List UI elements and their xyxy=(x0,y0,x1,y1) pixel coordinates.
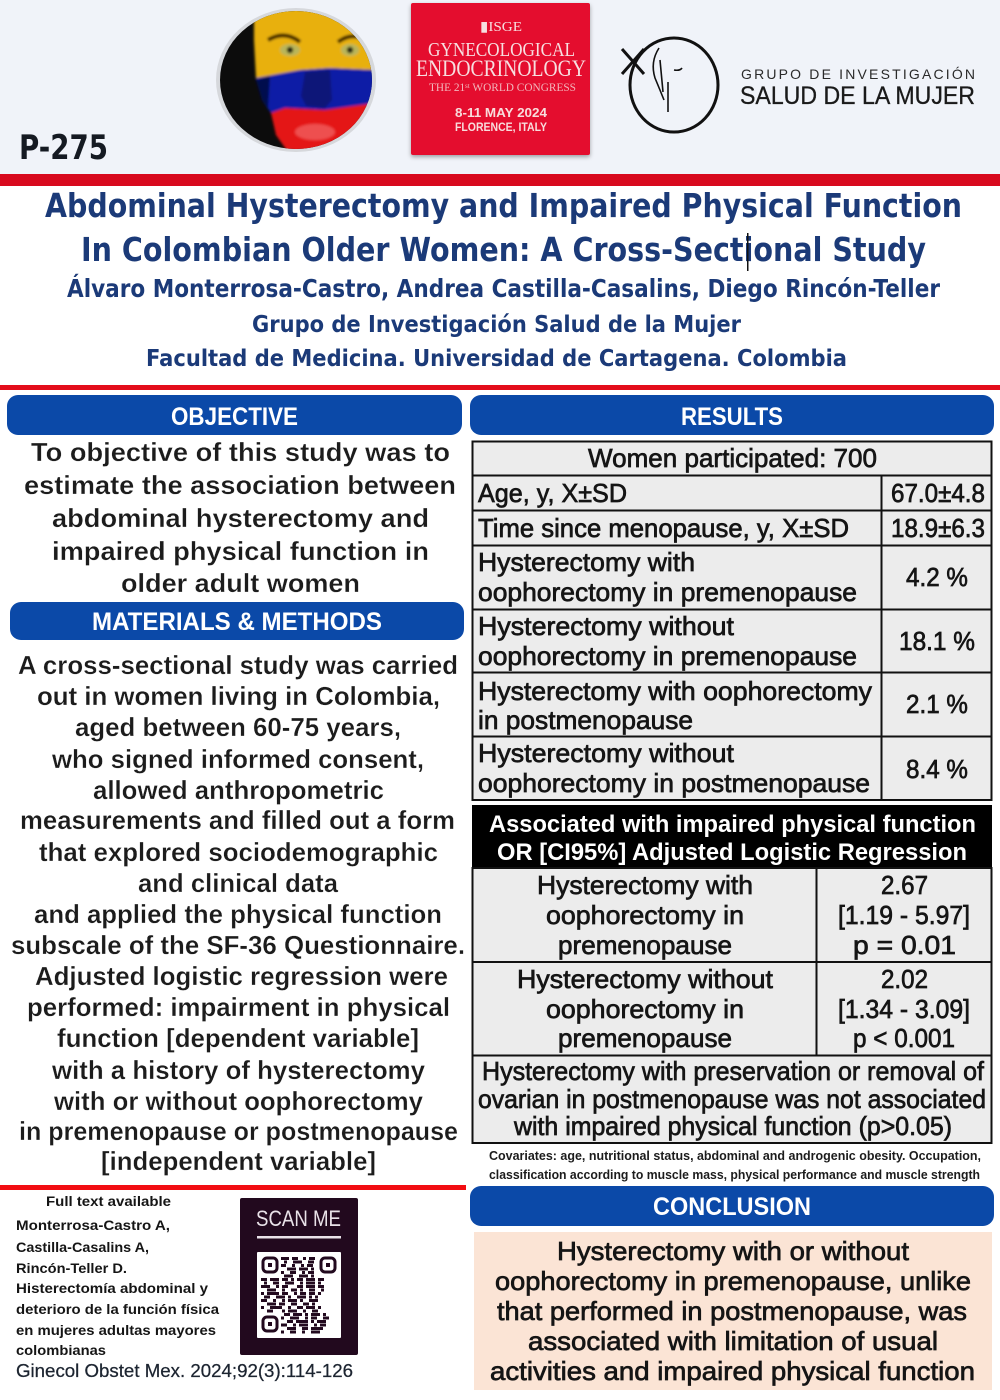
red divider xyxy=(0,385,1000,390)
heading: conclusion: CONCLUSION xyxy=(653,1193,811,1221)
methods text: with or without oophorectomy xyxy=(53,1086,424,1116)
objective text: abdominal hysterectomy and xyxy=(52,503,429,533)
methods text: out in women living in Colombia, xyxy=(37,681,440,711)
conclusion text: Hysterectomy with or without xyxy=(557,1236,910,1266)
congress logo card: FLORENCE, ITALY xyxy=(455,120,547,134)
table: participant characteristics xyxy=(472,442,992,800)
objective text: To objective of this study was to xyxy=(31,437,450,467)
methods text: who signed informed consent, xyxy=(51,744,424,774)
table: participant characteristics: Time since menopause, y, X±SD xyxy=(478,513,849,543)
citation: Monterrosa-Castro A, xyxy=(16,1217,170,1233)
table: adjusted odds ratios xyxy=(472,868,992,1143)
table header: associated with impaired physical function: OR [CI95%] Adjusted Logistic Regression xyxy=(497,839,967,866)
congress logo card: ▮ISGE xyxy=(480,20,522,35)
table: participant characteristics: oophorectomy in postmenopause xyxy=(478,768,870,798)
table: adjusted odds ratios: Hysterectomy with preservation or removal of xyxy=(482,1056,985,1086)
QR code card: SCAN ME xyxy=(256,1206,341,1231)
table: adjusted odds ratios: [1.19 - 5.97] xyxy=(838,900,970,930)
citation: colombianas xyxy=(16,1342,106,1358)
citation: Castilla-Casalins A, xyxy=(16,1239,149,1255)
table: adjusted odds ratios: premenopause xyxy=(558,1023,732,1053)
methods text: [independent variable] xyxy=(101,1146,376,1176)
conclusion text: that performed in postmenopause, was xyxy=(497,1296,967,1326)
title xyxy=(45,186,962,271)
table: adjusted odds ratios: 2.67 xyxy=(881,870,928,900)
table: adjusted odds ratios: Hysterectomy with xyxy=(537,870,753,900)
methods text xyxy=(11,650,465,1176)
table: adjusted odds ratios: oophorectomy in xyxy=(546,994,744,1024)
congress logo card: 8-11 MAY 2024 xyxy=(455,106,547,120)
table: participant characteristics: oophorectomy in premenopause xyxy=(478,577,857,607)
panel: reference xyxy=(16,1193,358,1381)
icon: face painted with Colombian flag xyxy=(215,5,380,155)
methods text: measurements and filled out a form xyxy=(20,805,455,835)
full text note: Full text available xyxy=(46,1193,171,1209)
conclusion text: associated with limitation of usual xyxy=(528,1326,938,1356)
affiliation: Facultad de Medicina. Universidad de Cartagena. Colombia xyxy=(146,346,847,372)
methods text: function [dependent variable] xyxy=(57,1023,419,1053)
heading: objective: OBJECTIVE xyxy=(171,403,298,431)
panel: conclusion xyxy=(470,1186,994,1390)
table: adjusted odds ratios: Hysterectomy without xyxy=(517,964,774,994)
congress logo card: GYNECOLOGICAL xyxy=(428,39,575,61)
table: participant characteristics: 4.2 % xyxy=(906,562,968,592)
table: participant characteristics: 8.4 % xyxy=(906,754,968,784)
congress logo card: THE 21ˢᵗ WORLD CONGRESS xyxy=(429,82,576,94)
table: adjusted odds ratios: p = 0.01 xyxy=(853,930,956,960)
affiliation xyxy=(146,312,847,372)
research group logo: GRUPO DE INVESTIGACIÓN xyxy=(741,66,975,82)
table: participant characteristics: Hysterectomy without xyxy=(478,738,735,768)
methods text: and applied the physical function xyxy=(34,899,442,929)
table: participant characteristics: 18.9±6.3 xyxy=(891,513,985,543)
table: adjusted odds ratios: 2.02 xyxy=(881,964,928,994)
methods text: performed: impairment in physical xyxy=(27,992,450,1022)
top red band xyxy=(0,174,1000,186)
heading: materials and methods xyxy=(10,602,464,640)
methods text: that explored sociodemographic xyxy=(39,837,438,867)
congress logo card: ENDOCRINOLOGY xyxy=(416,56,586,81)
table: adjusted odds ratios: [1.34 - 3.09] xyxy=(838,994,970,1024)
methods text: aged between 60-75 years, xyxy=(75,712,401,742)
panel: objective xyxy=(7,395,462,598)
methods text: with a history of hysterectomy xyxy=(51,1055,426,1085)
research group logo: SALUD DE LA MUJER xyxy=(740,82,975,110)
citation xyxy=(16,1217,219,1358)
congress logo card xyxy=(411,3,590,155)
red divider bottom left xyxy=(0,1185,466,1190)
table: adjusted odds ratios: p < 0.001 xyxy=(853,1023,955,1053)
table: participant characteristics: 67.0±4.8 xyxy=(891,478,985,508)
methods text: subscale of the SF-36 Questionnaire. xyxy=(11,930,465,960)
covariates note: classification according to muscle mass, physical performance and muscle strength xyxy=(489,1167,980,1182)
objective text: estimate the association between xyxy=(24,470,456,500)
panel: materials and methods xyxy=(10,602,465,1176)
methods text: and clinical data xyxy=(138,868,339,898)
affiliation: Grupo de Investigación Salud de la Mujer xyxy=(252,312,742,338)
objective text: older adult women xyxy=(121,568,360,598)
methods text: allowed anthropometric xyxy=(93,775,384,805)
citation: Histerectomía abdominal y xyxy=(16,1280,208,1296)
table: participant characteristics: oophorectomy in premenopause xyxy=(478,641,857,671)
conclusion text xyxy=(474,1232,992,1390)
objective text xyxy=(24,437,456,598)
citation: deterioro de la función física xyxy=(16,1301,219,1317)
methods text: Adjusted logistic regression were xyxy=(35,961,448,991)
table: participant characteristics: Hysterectomy with xyxy=(478,547,695,577)
table: participant characteristics: Hysterectomy without xyxy=(478,611,735,641)
panel: results xyxy=(470,395,994,1182)
table: participant characteristics: Women participated: 700 xyxy=(588,443,877,473)
conclusion text: activities and impaired physical function xyxy=(490,1356,975,1386)
covariates note xyxy=(489,1148,981,1182)
header background xyxy=(0,0,1000,175)
table: adjusted odds ratios: premenopause xyxy=(558,930,732,960)
research group logo xyxy=(622,38,975,132)
poster code P-275: P-275 xyxy=(19,128,108,168)
heading: results: RESULTS xyxy=(681,403,783,431)
table: participant characteristics: 18.1 % xyxy=(899,626,975,656)
methods text: in premenopause or postmenopause xyxy=(19,1116,458,1146)
heading: results xyxy=(470,395,994,435)
table header: associated with impaired physical function: Associated with impaired physical function xyxy=(489,811,976,838)
citation: Rincón-Teller D. xyxy=(16,1260,127,1276)
table: adjusted odds ratios: oophorectomy in xyxy=(546,900,744,930)
table: participant characteristics: 2.1 % xyxy=(906,689,968,719)
journal: Ginecol Obstet Mex. 2024;92(3):114-126 xyxy=(16,1361,353,1381)
heading: conclusion xyxy=(470,1186,994,1226)
QR code card xyxy=(240,1198,358,1355)
table: participant characteristics: Hysterectomy with oophorectomy xyxy=(478,676,872,706)
conclusion text: oophorectomy in premenopause, unlike xyxy=(495,1266,971,1296)
table: adjusted odds ratios: ovarian in postmenopause was not associated xyxy=(478,1084,986,1114)
table: adjusted odds ratios: with impaired physical function (p>0.05) xyxy=(513,1111,952,1141)
covariates note: Covariates: age, nutritional status, abdominal and androgenic obesity. Occupation, xyxy=(489,1148,981,1163)
table: participant characteristics: in postmenopause xyxy=(478,705,693,735)
heading: materials and methods: MATERIALS & METHODS xyxy=(92,608,382,636)
table: participant characteristics: Age, y, X±SD xyxy=(478,478,627,508)
table header: associated with impaired physical function xyxy=(472,805,992,868)
citation: en mujeres adultas mayores xyxy=(16,1322,216,1338)
heading: objective xyxy=(7,395,462,435)
objective text: impaired physical function in xyxy=(52,536,429,566)
methods text: A cross-sectional study was carried xyxy=(18,650,458,680)
